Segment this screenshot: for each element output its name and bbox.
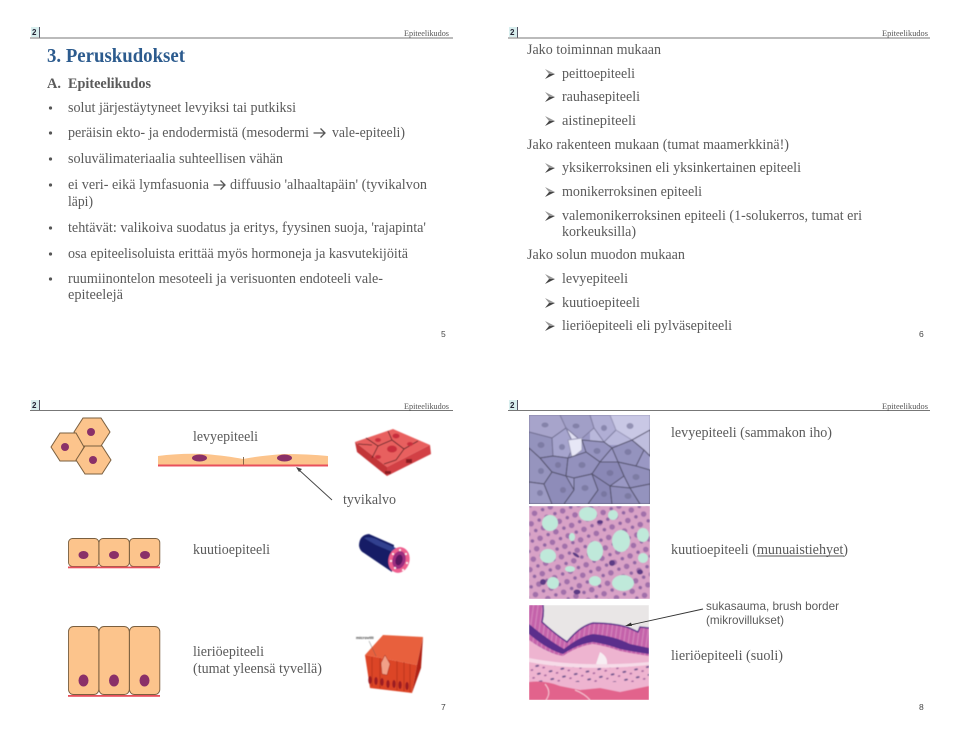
- bullet list: tehtävät: valikoiva suodatus ja eritys, fyysinen suoja, 'rajapinta': [68, 220, 426, 236]
- classification by structure: valemonikerroksinen epiteeli (1-solukerros, tumat eri: [562, 208, 862, 224]
- bullet list: osa epiteelisoluista erittää myös hormoneja ja kasvutekijöitä: [68, 246, 409, 262]
- panel: slide 5 general properties of epithelium: [30, 27, 453, 339]
- bullet list: solut järjestäytyneet levyiksi tai putkiksi: [68, 100, 296, 116]
- slide header: 2: [32, 28, 37, 37]
- bullet list: diffuusio 'alhaaltapäin' (tyvikalvon: [230, 177, 428, 193]
- micrograph: intestinal columnar epithelium: [529, 605, 649, 700]
- label: kidney tubule cuboidal: kuutioepiteeli (munuaistiehyet): [671, 542, 848, 558]
- bullet list: ei veri- eikä lymfasuonia: [68, 177, 210, 193]
- classification by function: Jako toiminnan mukaan: [527, 42, 662, 58]
- bullet list: läpi): [68, 194, 93, 210]
- diagram: squamous cross section: [158, 454, 328, 466]
- label: brush border: (mikrovillukset): [706, 613, 784, 627]
- slide header: [30, 400, 453, 411]
- bullet list: [49, 100, 428, 303]
- arrow: basement membrane: [296, 467, 332, 500]
- slide header: 2: [32, 401, 37, 410]
- label: squamous epithelium: levyepiteeli: [193, 429, 258, 445]
- classification by function: peittoepiteeli: [562, 66, 635, 82]
- label: frog squamous: levyepiteeli (sammakon iho): [671, 425, 832, 441]
- label: intestinal columnar: lieriöepiteeli (suoli): [671, 648, 783, 664]
- classification by structure: [527, 137, 862, 240]
- classification by function: rauhasepiteeli: [562, 89, 640, 105]
- slide header: Epiteelikudos: [882, 401, 928, 411]
- classification by cell shape: Jako solun muodon mukaan: [527, 247, 686, 263]
- classification by cell shape: lieriöepiteeli eli pylväsepiteeli: [562, 318, 732, 334]
- panel: slide 6 classification of epithelium: [508, 27, 930, 339]
- icon: columnar block with microvilli: [356, 635, 423, 693]
- subheading: Epiteelikudos: [68, 76, 151, 92]
- panel: slide 7 epithelium cell shapes: [30, 400, 453, 712]
- classification by cell shape: kuutioepiteeli: [562, 295, 640, 311]
- icon: red squamous sheet block: [355, 429, 431, 476]
- page number 5: 5: [441, 329, 446, 339]
- page number 8: 8: [919, 702, 924, 712]
- panel: slide 8 micrographs: [508, 400, 930, 712]
- micrograph: frog squamous epithelium: [529, 415, 650, 504]
- label: cuboidal epithelium: kuutioepiteeli: [193, 542, 270, 558]
- classification by structure: Jako rakenteen mukaan (tumat maamerkkinä!): [527, 137, 789, 153]
- micrograph: kidney tubule cuboidal epithelium: [529, 506, 650, 599]
- bullet list: ruumiinontelon mesoteeli ja verisuonten endoteeli vale-: [68, 271, 383, 287]
- bullet list: epiteelejä: [68, 287, 124, 303]
- classification by structure: korkeuksilla): [562, 224, 636, 240]
- classification by function: [527, 42, 662, 129]
- slide header: [508, 27, 930, 38]
- classification by structure: yksikerroksinen eli yksinkertainen epiteeli: [562, 160, 801, 176]
- classification by function: aistinepiteeli: [562, 113, 636, 129]
- subheading: A.: [47, 76, 61, 92]
- bullet list: peräisin ekto- ja endodermistä (mesodermi: [68, 125, 309, 141]
- label: columnar epithelium: lieriöepiteeli: [193, 644, 264, 660]
- slide header: 2: [510, 401, 515, 410]
- classification by cell shape: levyepiteeli: [562, 271, 628, 287]
- classification by structure: monikerroksinen epiteeli: [562, 184, 702, 200]
- arrow: brush border: [625, 609, 703, 626]
- bullet list: soluvälimateriaalia suhteellisen vähän: [68, 151, 284, 167]
- slide header: Epiteelikudos: [404, 28, 449, 38]
- icon: cuboidal tube: [359, 534, 413, 575]
- title: 3. Peruskudokset: [47, 45, 185, 67]
- label: columnar epithelium: (tumat yleensä tyvellä): [193, 661, 322, 677]
- icon: squamous cells top view: [51, 418, 111, 474]
- slide header: Epiteelikudos: [882, 28, 928, 38]
- label: columnar epithelium: [193, 644, 322, 677]
- classification by cell shape: [527, 247, 732, 334]
- label: brush border: [706, 599, 839, 627]
- page number 6: 6: [919, 329, 924, 339]
- diagram: columnar cells: [68, 626, 160, 697]
- label: basement membrane: tyvikalvo: [343, 492, 396, 508]
- slide header: [508, 400, 930, 411]
- diagram: cuboidal cells: [68, 538, 160, 568]
- slide header: [30, 27, 453, 38]
- slide header: 2: [510, 28, 515, 37]
- bullet list: vale-epiteeli): [332, 125, 405, 141]
- icon: columnar block with microvilli: microvilli: [356, 635, 374, 640]
- label: brush border: sukasauma, brush border: [706, 599, 839, 613]
- slide header: Epiteelikudos: [404, 401, 449, 411]
- page number 7: 7: [441, 702, 446, 712]
